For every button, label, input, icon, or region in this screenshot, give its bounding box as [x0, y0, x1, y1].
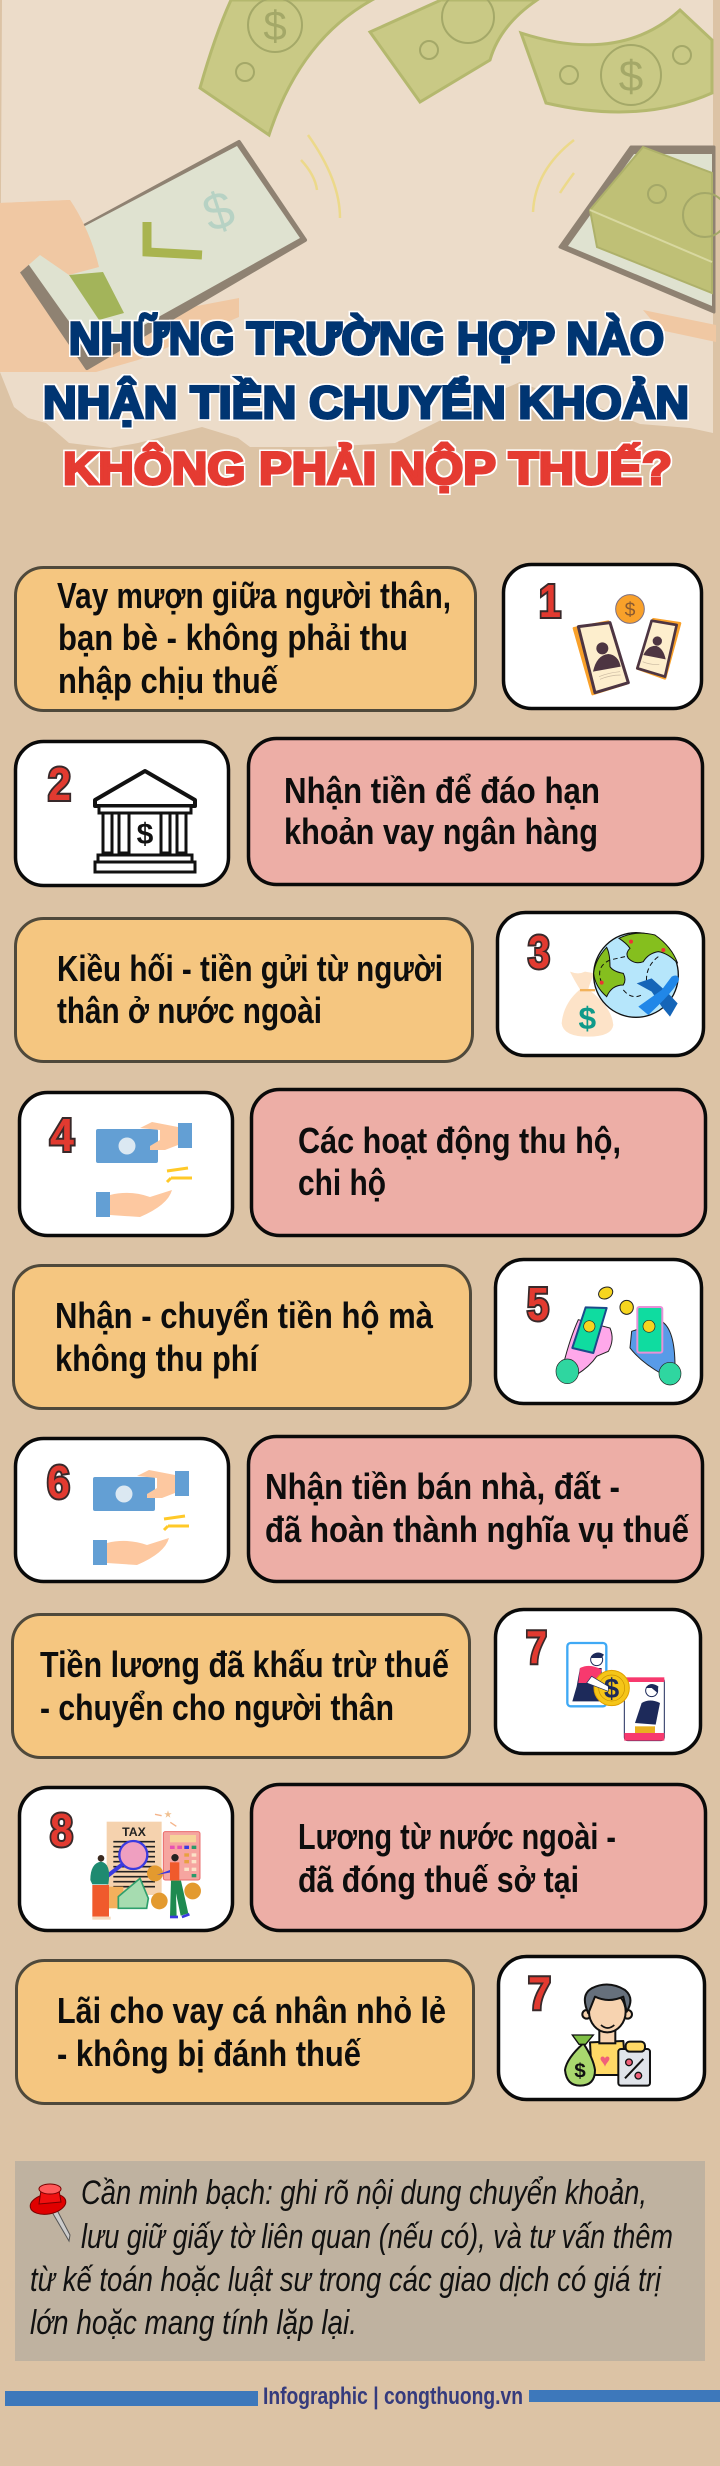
panel: item 1 icon, two phones and coin: $	[625, 600, 636, 621]
panel: item 3 text	[16, 918, 472, 1062]
panel: item 6 icon, hands exchanging money	[16, 1438, 228, 1582]
signal waves	[301, 135, 574, 218]
panel: item 7 icon, people passing coin between phones: $	[604, 1673, 619, 1704]
panel: item 4 text: Các hoạt động thu hộ,	[298, 1120, 621, 1161]
flying banknote right	[521, 10, 712, 112]
panel: item 2 icon, bank: $	[137, 818, 154, 851]
flying banknote left: $	[263, 2, 287, 49]
panel: item 3 icon, globe and money bag: 3	[528, 926, 550, 978]
panel: item 4 text	[252, 1090, 706, 1236]
panel: item 7 text: - chuyển cho người thân	[40, 1687, 394, 1728]
panel: item 2 text	[248, 738, 702, 884]
item 7	[12, 1610, 700, 1758]
footer	[5, 2383, 720, 2410]
panel: item 1 text: bạn bè - không phải thu	[58, 617, 408, 658]
panel: item 9 text: - không bị đánh thuế	[57, 2033, 362, 2074]
title: NHẬN TIỀN CHUYỂN KHOẢN	[43, 377, 689, 428]
panel: item 2 icon, bank	[16, 742, 228, 886]
title: KHÔNG PHẢI NỘP THUẾ?	[63, 443, 672, 494]
panel: item 6 icon, hands exchanging money: 6	[47, 1456, 70, 1508]
footer: Infographic | congthuong.vn	[263, 2383, 523, 2410]
item 9	[16, 1956, 704, 2104]
panel: item 8 icon, tax document and people	[20, 1788, 232, 1930]
torn paper background	[0, 0, 713, 448]
panel: item 3 icon, globe and money bag: $	[579, 1000, 597, 1036]
panel: item 7 text	[12, 1614, 470, 1758]
item 5	[14, 1260, 702, 1408]
panel: item 4 text: chi hộ	[298, 1162, 386, 1203]
panel: item 9 icon, man with money bag and percent tag: 7	[528, 1967, 551, 2019]
panel: item 3 icon, globe and money bag	[498, 912, 704, 1056]
panel: item 9 icon, man with money bag and percent tag: $	[574, 2060, 586, 2083]
panel: item 9 icon, man with money bag and percent tag	[498, 1956, 704, 2100]
panel: item 9 text	[16, 1960, 474, 2104]
note text	[30, 2174, 673, 2342]
flying banknote right: $	[619, 52, 643, 101]
panel: item 2 icon, bank: 2	[48, 758, 71, 810]
panel: item 5 text	[14, 1266, 470, 1408]
panel: item 9 text: Lãi cho vay cá nhân nhỏ lẻ	[57, 1990, 446, 2031]
item 4	[20, 1090, 706, 1236]
panel: item 5 icon, hands holding phones	[496, 1260, 702, 1404]
icon: red push pin	[29, 2184, 70, 2241]
item 8	[20, 1784, 706, 1930]
panel: item 8 text	[252, 1784, 706, 1930]
note text: lớn hoặc mang tính lặp lại.	[30, 2304, 357, 2342]
panel: item 4 icon, hands exchanging money	[20, 1092, 232, 1236]
panel: item 1 icon, two phones and coin	[504, 564, 702, 708]
panel: item 6 text	[248, 1436, 702, 1582]
item 6	[16, 1436, 702, 1582]
item 1	[16, 564, 702, 710]
panel: item 3 text: thân ở nước ngoài	[57, 990, 322, 1031]
note panel	[15, 2161, 705, 2361]
panel: item 5 icon, hands holding phones: 5	[527, 1278, 549, 1330]
phone held in left hand: $	[196, 180, 242, 244]
panel: item 1 icon, two phones and coin: 1	[539, 575, 561, 627]
panel: item 2 text: Nhận tiền để đáo hạn	[284, 770, 600, 811]
panel: item 7 icon, people passing coin between phones: 7	[526, 1621, 547, 1673]
item 3	[16, 912, 704, 1062]
panel: item 4 icon, hands exchanging money: 4	[50, 1109, 74, 1161]
flying banknote middle	[370, 0, 537, 102]
panel: item 1 text: Vay mượn giữa người thân,	[57, 575, 451, 616]
panel: item 3 text: Kiều hối - tiền gửi từ người	[57, 948, 443, 989]
title: NHỮNG TRƯỜNG HỢP NÀO	[69, 313, 664, 364]
title	[43, 313, 689, 494]
panel: item 8 text: đã đóng thuế sở tại	[298, 1859, 579, 1900]
panel: item 8 icon, tax document and people: ★	[164, 1810, 172, 1819]
panel: item 8 text: Lương từ nước ngoài -	[298, 1816, 616, 1857]
panel: item 2 text: khoản vay ngân hàng	[284, 811, 598, 852]
panel: item 6 text: Nhận tiền bán nhà, đất -	[265, 1466, 620, 1507]
phone held in left hand	[0, 142, 305, 372]
panel: item 9 icon, man with money bag and percent tag: ♥	[600, 2051, 610, 2071]
panel: item 5 text: Nhận - chuyển tiền hộ mà	[55, 1295, 434, 1336]
panel: item 7 icon, people passing coin between phones	[496, 1610, 700, 1754]
item 2	[16, 738, 702, 886]
panel: item 5 text: không thu phí	[55, 1338, 259, 1379]
panel: item 1 text: nhập chịu thuế	[58, 660, 279, 701]
panel: item 1 text	[16, 568, 476, 710]
panel: item 7 text: Tiền lương đã khấu trừ thuế	[40, 1644, 450, 1685]
flying banknote left	[200, 0, 372, 135]
phone and cash in right hand	[560, 147, 720, 342]
panel: item 8 icon, tax document and people: 8	[50, 1804, 73, 1856]
header illustration	[0, 0, 720, 448]
panel: item 8 icon, tax document and people: TAX	[122, 1825, 147, 1839]
